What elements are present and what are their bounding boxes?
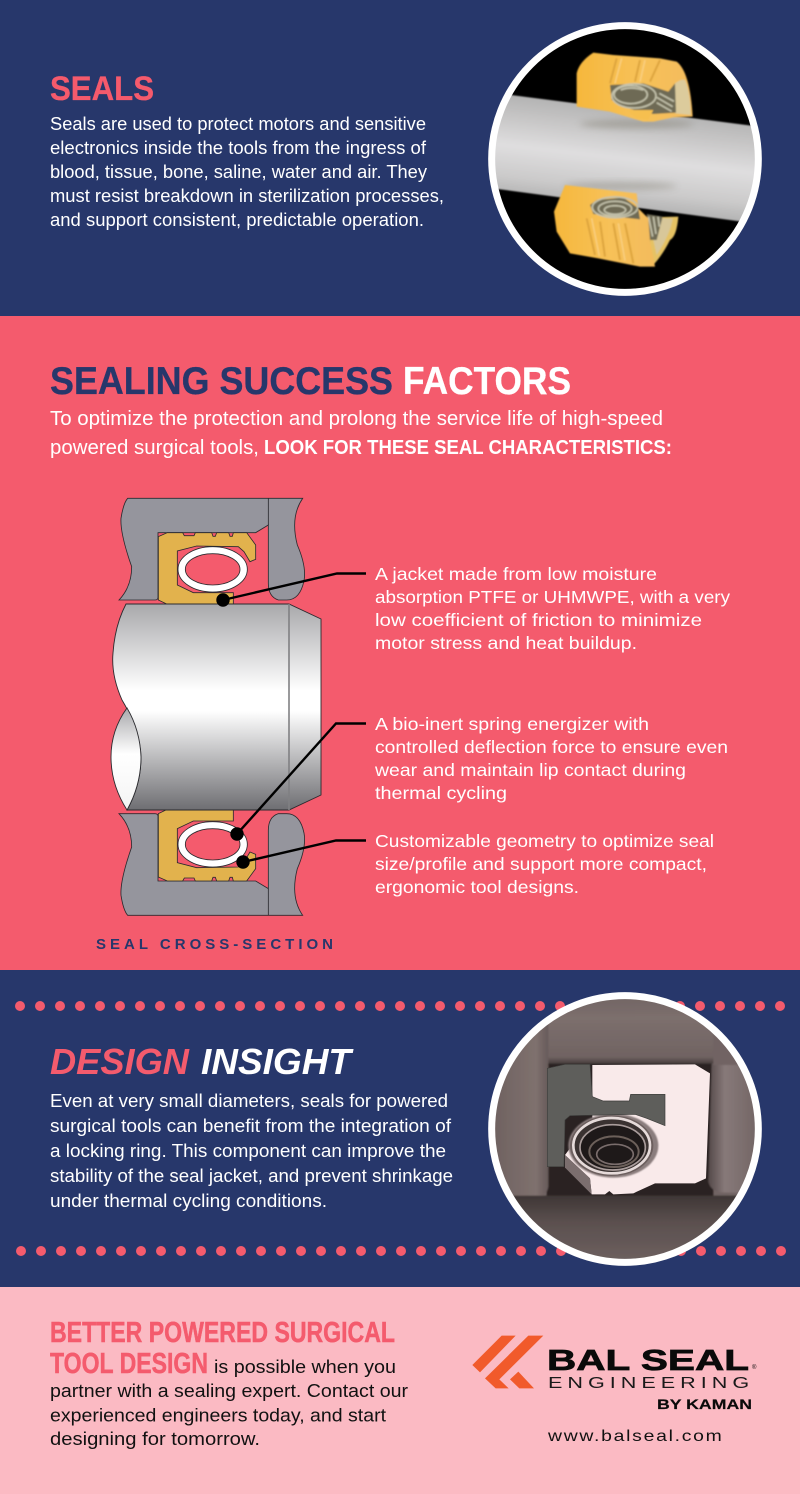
- heading: better powered surgical tool design: BETTER POWERED SURGICAL: [50, 1317, 395, 1349]
- callout: geometry: ergonomic tool designs.: [375, 877, 579, 897]
- diagram: seal cross-section: [111, 498, 366, 915]
- leader line: jacket: [216, 574, 366, 607]
- website url: www.balseal.com: [547, 1427, 722, 1445]
- text block: design insight description: [50, 1090, 453, 1211]
- text block: factors introduction: To optimize the protection and prolong the service life of high-speed: [50, 408, 663, 430]
- shaft: [111, 604, 321, 810]
- floor: [514, 1195, 736, 1252]
- text block: factors introduction: powered surgical tools,: [50, 437, 259, 459]
- bottom housing and seal: [119, 810, 305, 915]
- shaft: [495, 94, 755, 222]
- heading: better powered surgical tool design: TOOL DESIGN: [50, 1348, 208, 1380]
- callout: spring energizer: [374, 714, 728, 803]
- logo wordmark: BAL SEAL: [547, 1345, 749, 1377]
- logo: bal seal engineering: BY KAMAN: [657, 1396, 752, 1412]
- callout: jacket: [375, 564, 730, 653]
- callout: spring energizer: A bio-inert spring energizer with: [375, 714, 649, 734]
- seal jacket: [565, 1064, 710, 1194]
- spring: [568, 1114, 658, 1178]
- locking ring: [547, 1064, 665, 1167]
- text block: factors introduction: [50, 408, 672, 459]
- top housing and seal: [119, 498, 305, 604]
- logo: bal seal engineering: ENGINEERING: [548, 1375, 749, 1392]
- text block: seals description: blood, tissue, bone, saline, water and air. They: [50, 162, 427, 182]
- callout: spring energizer: controlled deflection force to ensure even: [375, 737, 728, 757]
- callout: spring energizer: thermal cycling: [375, 783, 507, 803]
- heading: better powered surgical tool design: [50, 1317, 395, 1380]
- image: seal on shaft in circular frame: [480, 26, 780, 292]
- icon: chevron mark: [472, 1336, 543, 1388]
- heading: sealing success factors: SEALING SUCCESS: [50, 360, 393, 403]
- heading: design insight: DESIGN: [50, 1041, 190, 1082]
- text block: seals description: [50, 114, 444, 230]
- dotted rule bottom: [16, 1246, 786, 1256]
- logo: bal seal engineering: [472, 1336, 757, 1412]
- right pillar: [708, 1063, 746, 1192]
- callout: jacket: low coefficient of friction to minimize: [375, 610, 702, 630]
- callout: geometry: size/profile and support more compact,: [375, 854, 707, 874]
- text block: design insight description: under thermal cycling conditions.: [50, 1190, 327, 1211]
- text block: call to action: [50, 1357, 408, 1449]
- top jacket: [577, 53, 693, 122]
- shadows on shaft: [580, 119, 693, 129]
- leader line: spring: [230, 724, 366, 841]
- panel: sealing success factors: [0, 316, 800, 970]
- text block: design insight description: surgical tools can benefit from the integration of: [50, 1115, 452, 1136]
- callout: jacket: absorption PTFE or UHMWPE, with a very: [375, 587, 730, 607]
- text block: design insight description: stability of the seal jacket, and prevent shrinkage: [50, 1165, 453, 1186]
- top wall: [548, 1012, 714, 1064]
- callout: jacket: motor stress and heat buildup.: [375, 633, 637, 653]
- heading: seals: SEALS: [50, 70, 154, 108]
- callout: geometry: [375, 831, 714, 897]
- panel: seals introduction: [50, 22, 762, 296]
- text block: seals description: Seals are used to protect motors and sensitive: [50, 114, 426, 134]
- bottom jacket: [554, 185, 678, 267]
- leader line: geometry: [236, 840, 366, 869]
- text block: call to action: designing for tomorrow.: [50, 1429, 260, 1449]
- text block: seals description: electronics inside the tools from the ingress of: [50, 138, 427, 158]
- heading: design insight: INSIGHT: [201, 1041, 354, 1082]
- text block: call to action: partner with a sealing expert. Contact our: [50, 1381, 408, 1401]
- text block: call to action: is possible when you: [214, 1357, 396, 1377]
- heading: sealing success factors: FACTORS: [403, 360, 571, 403]
- caption: seal cross-section: SEAL CROSS-SECTION: [96, 936, 333, 953]
- text block: design insight description: Even at very small diameters, seals for powered: [50, 1090, 448, 1111]
- text block: seals description: and support consistent, predictable operation.: [50, 210, 424, 230]
- recess: [547, 1064, 713, 1197]
- callout: jacket: A jacket made from low moisture: [375, 564, 657, 584]
- logo: bal seal engineering: ®: [752, 1364, 757, 1371]
- text block: seals description: must resist breakdown in sterilization processes,: [50, 186, 444, 206]
- left pillar: [516, 1026, 550, 1196]
- text block: factors introduction: LOOK FOR THESE SEAL CHARACTERISTICS:: [264, 437, 672, 459]
- image: locking ring seal close-up in circular frame: [487, 992, 763, 1269]
- callout: geometry: Customizable geometry to optimize seal: [375, 831, 714, 851]
- panel: call to action footer: [0, 1287, 800, 1494]
- dotted rule top: [15, 1001, 785, 1011]
- panel: design insight: [15, 992, 786, 1266]
- text block: design insight description: a locking ring. This component can improve the: [50, 1140, 446, 1161]
- callout: spring energizer: wear and maintain lip contact during: [374, 760, 686, 780]
- text block: call to action: experienced engineers today, and start: [50, 1406, 386, 1426]
- heading: design insight: [50, 1041, 354, 1082]
